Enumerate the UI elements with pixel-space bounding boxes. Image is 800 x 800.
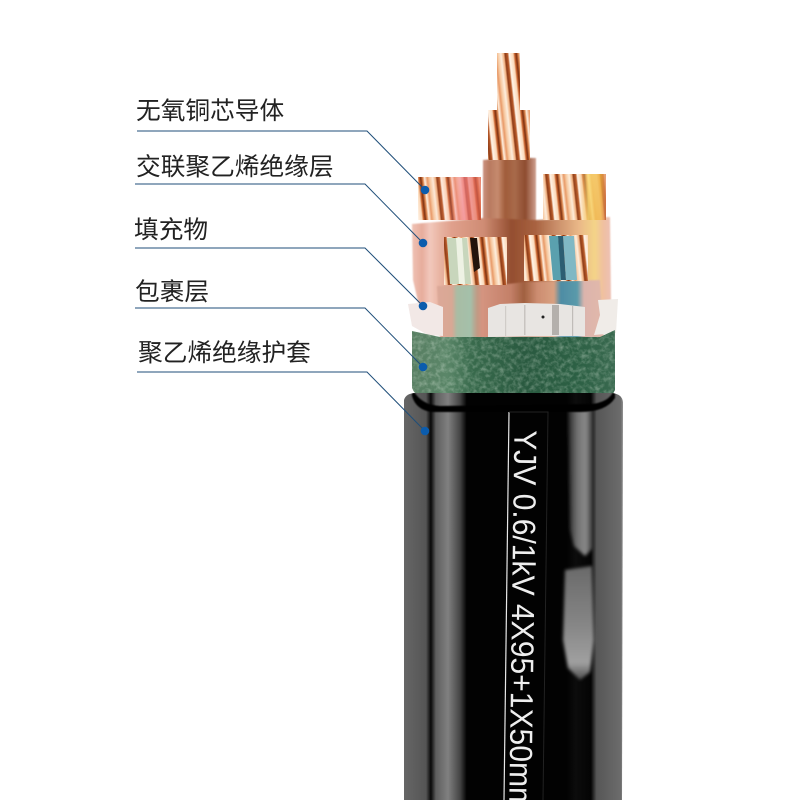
upper left copper conductor (418, 177, 481, 220)
centre core sheath (483, 158, 536, 290)
upper right copper conductor (543, 174, 606, 220)
infographic: cable cross-section (134, 53, 623, 800)
jacket melted blob (563, 566, 594, 680)
label: oxygen-free copper conductor (136, 97, 429, 194)
printed faint edge line (509, 412, 548, 800)
label: wrapping layer: 包裹层 (135, 278, 209, 306)
cable photo (404, 53, 624, 800)
white filler strips (408, 299, 618, 337)
label: wrapping layer (135, 278, 427, 371)
label: oxygen-free copper conductor: 无氧铜芯导体 (136, 97, 284, 125)
jacket shiny highlight (568, 408, 593, 556)
label: XLPE insulation: 交联聚乙烯绝缘层 (136, 153, 334, 181)
central copper conductor top (488, 53, 530, 160)
lower right copper conductor (524, 235, 588, 281)
lower core sheaths (437, 280, 604, 340)
label: filler (134, 216, 427, 310)
outer core sheaths (412, 217, 611, 320)
green wrapping layer (412, 330, 615, 394)
green layer shadow (411, 393, 616, 413)
label: filler: 填充物 (134, 216, 208, 244)
label: PE insulating jacket: 聚乙烯绝缘护套 (138, 339, 311, 367)
label: PE insulating jacket (137, 339, 429, 435)
lower left copper conductor (444, 237, 507, 285)
black outer jacket (404, 388, 624, 800)
label: XLPE insulation (135, 153, 427, 247)
printed guide line (504, 412, 509, 800)
